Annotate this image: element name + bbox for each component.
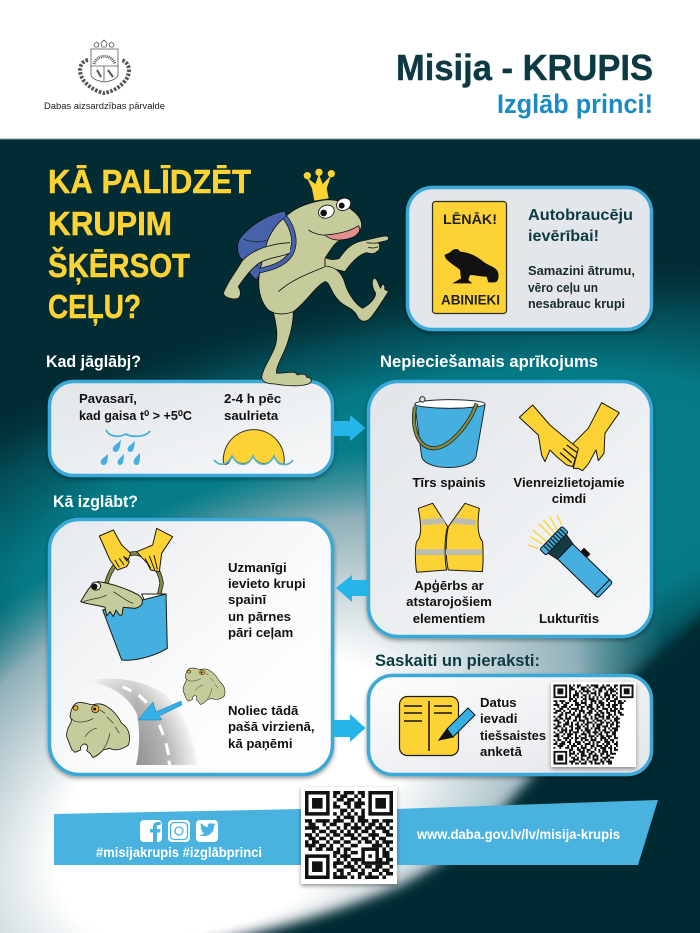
backpack <box>238 211 287 280</box>
sunset text <box>224 391 281 423</box>
icon: instagram <box>168 820 190 842</box>
vest label: elementiem <box>413 611 485 626</box>
icon: gloves <box>519 403 619 471</box>
icon: rain <box>101 430 150 465</box>
icon: twitter <box>196 820 218 842</box>
icon: flashlight <box>528 515 616 602</box>
drivers text: Samazini ātrumu, <box>528 263 635 278</box>
rescue text 2: pašā virzienā, <box>228 719 314 734</box>
illustration: toad in bucket <box>81 528 173 660</box>
yellow heading: KĀ PALĪDZĒT <box>48 163 251 200</box>
crown <box>304 169 335 201</box>
body, head and raised leg <box>259 200 389 321</box>
rescue text 1: ievieto krupi <box>228 576 306 591</box>
panel: drivers notice: ievērībai! <box>528 228 599 245</box>
drivers text: nesabrauc krupi <box>528 296 625 311</box>
arrow: equipment to rescue <box>336 575 367 602</box>
illustration: small toad <box>183 668 225 704</box>
gloves label: cimdi <box>552 491 586 506</box>
illustration: road <box>85 679 198 765</box>
icon: vest <box>415 503 483 572</box>
website url: www.daba.gov.lv/lv/misija-krupis <box>416 827 620 842</box>
panel: rescue <box>50 520 332 774</box>
heading: rescue: Kā izglābt? <box>53 492 138 511</box>
backpack strap <box>259 217 294 271</box>
panel: equipment <box>368 382 652 636</box>
spring text: kad gaisa t⁰ > +5⁰C <box>79 408 192 423</box>
yellow heading <box>48 163 251 325</box>
subtitle: Izglāb princi! <box>497 89 653 119</box>
spring text: Pavasarī, <box>79 391 137 406</box>
panel: count <box>368 676 652 774</box>
main title: Misija - KRUPIS <box>396 47 653 88</box>
frog prince mascot <box>223 169 389 386</box>
eyes <box>317 196 353 220</box>
count text: anketā <box>480 744 522 759</box>
count text: Datus <box>480 695 517 710</box>
road sign <box>432 202 506 314</box>
bucket label: Tīrs spainis <box>412 475 486 490</box>
arrow: toad direction <box>138 701 182 720</box>
heading: count: Saskaiti un pieraksti: <box>375 651 540 670</box>
rescue text 2: kā paņēmi <box>228 736 293 751</box>
standing leg <box>262 312 311 386</box>
drivers text: vēro ceļu un <box>528 280 598 295</box>
panel: drivers notice <box>408 188 652 330</box>
QR code: survey <box>551 682 636 767</box>
spring text <box>79 391 192 423</box>
header band <box>0 0 700 140</box>
yellow heading: KRUPIM <box>48 205 172 242</box>
sunset text: 2-4 h pēc <box>224 391 281 406</box>
mouth <box>308 226 360 240</box>
gloves label: Vienreizlietojamie <box>513 475 625 490</box>
flashlight label: Lukturītis <box>539 611 599 626</box>
hashtags: #misijakrupis #izglābprinci <box>96 845 262 860</box>
rescue text 1: un pārnes <box>228 609 291 624</box>
yellow heading: CEĻU? <box>48 288 141 325</box>
gloves label <box>513 475 625 506</box>
thigh and finger lines <box>278 243 378 292</box>
logo: coat of arms <box>80 40 129 93</box>
vest label: Apģērbs ar <box>414 578 484 593</box>
heading: when: Kad jāglābj? <box>46 352 141 371</box>
backpack flap line <box>242 239 267 267</box>
drivers heading: Autobraucēju <box>528 207 633 224</box>
organisation name: Dabas aizsardzības pārvalde <box>44 101 165 112</box>
banner: website <box>395 800 658 865</box>
illustration: big toad <box>67 702 130 757</box>
icon: bucket <box>414 397 485 468</box>
road sign: ABINIEKI <box>441 292 500 308</box>
pointing arm <box>325 236 389 272</box>
arrow: rescue to count <box>334 714 366 742</box>
icon: sunset <box>214 430 293 465</box>
count text: tiešsaistes <box>480 728 546 743</box>
rescue text 1: Uzmanīgi <box>228 560 287 575</box>
vest label <box>406 578 492 626</box>
panel: when <box>50 382 332 476</box>
icon: notebook and pen <box>400 696 475 756</box>
vest label: atstarojošiem <box>406 594 492 609</box>
drivers text <box>528 263 635 311</box>
count text <box>480 695 546 759</box>
rescue text 1: spainī <box>228 592 266 607</box>
rescue text 1: pāri ceļam <box>228 625 293 640</box>
left arm <box>223 243 290 299</box>
road sign: LĒNĀK! <box>443 211 497 227</box>
sunset text: saulrieta <box>224 408 279 423</box>
QR code: website <box>301 787 397 884</box>
banner: social <box>54 809 302 865</box>
icon: facebook <box>140 820 162 842</box>
heading: equipment: Nepieciešamais aprīkojums <box>380 352 598 371</box>
rescue text 2: Noliec tādā <box>228 703 299 718</box>
rescue text 2 <box>228 703 314 751</box>
yellow heading: ŠĶĒRSOT <box>48 246 190 284</box>
arrow: when to equipment <box>334 415 366 441</box>
count text: ievadi <box>480 711 517 726</box>
rescue text 1 <box>228 560 306 640</box>
